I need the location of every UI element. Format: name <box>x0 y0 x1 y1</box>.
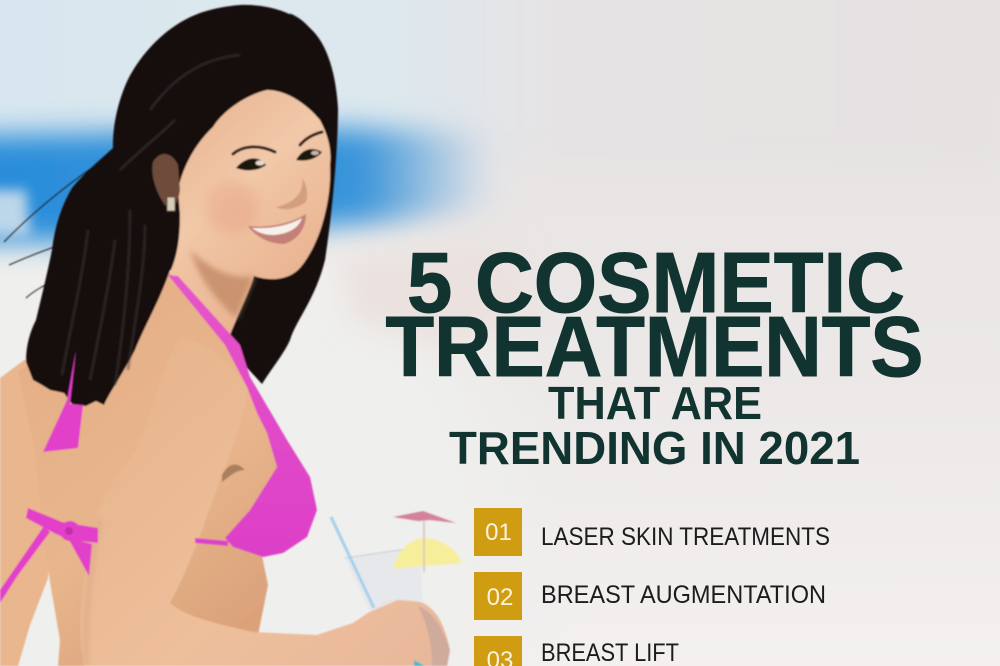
cocktail glass <box>331 511 462 666</box>
bikini back triangle <box>43 350 83 452</box>
brows <box>233 132 322 154</box>
drink <box>414 660 425 666</box>
upper arm and forearm <box>80 337 450 666</box>
far arm <box>0 358 60 666</box>
nose <box>276 178 307 209</box>
neck and face <box>170 90 331 335</box>
item 03 <box>474 636 679 666</box>
title line 2: TREATMENTS <box>386 300 924 395</box>
cocktail umbrella <box>393 511 456 523</box>
lemon slice <box>393 538 462 569</box>
item 02: BREAST AUGMENTATION <box>541 581 826 609</box>
woman illustration <box>0 5 462 666</box>
ear <box>152 154 180 207</box>
forearm shading <box>86 520 100 666</box>
neck shadow <box>190 250 254 318</box>
hair main <box>26 5 338 406</box>
bikini cup and halter strap <box>168 275 317 557</box>
item 02: 02 <box>487 584 513 611</box>
torso <box>18 272 278 666</box>
hair back strands <box>4 14 327 298</box>
eyes <box>236 149 322 170</box>
title <box>386 236 924 474</box>
list of treatments <box>474 508 830 666</box>
straw <box>331 517 374 608</box>
item 01: LASER SKIN TREATMENTS <box>541 523 830 551</box>
subtitle line 2: TRENDING IN 2021 <box>449 422 860 474</box>
item 02 <box>474 572 826 620</box>
earring <box>167 197 175 211</box>
title line 1: 5 COSMETIC <box>407 236 905 331</box>
item 01 <box>474 508 830 556</box>
hair highlights <box>62 55 240 385</box>
item 01: 01 <box>485 519 512 546</box>
fingers <box>418 606 450 666</box>
cheek blush <box>206 182 258 234</box>
subtitle line 1: THAT ARE <box>548 377 762 429</box>
mouth <box>248 214 306 244</box>
armpit shadow <box>222 465 245 482</box>
bikini tie <box>0 508 98 603</box>
bikini band <box>195 538 228 546</box>
